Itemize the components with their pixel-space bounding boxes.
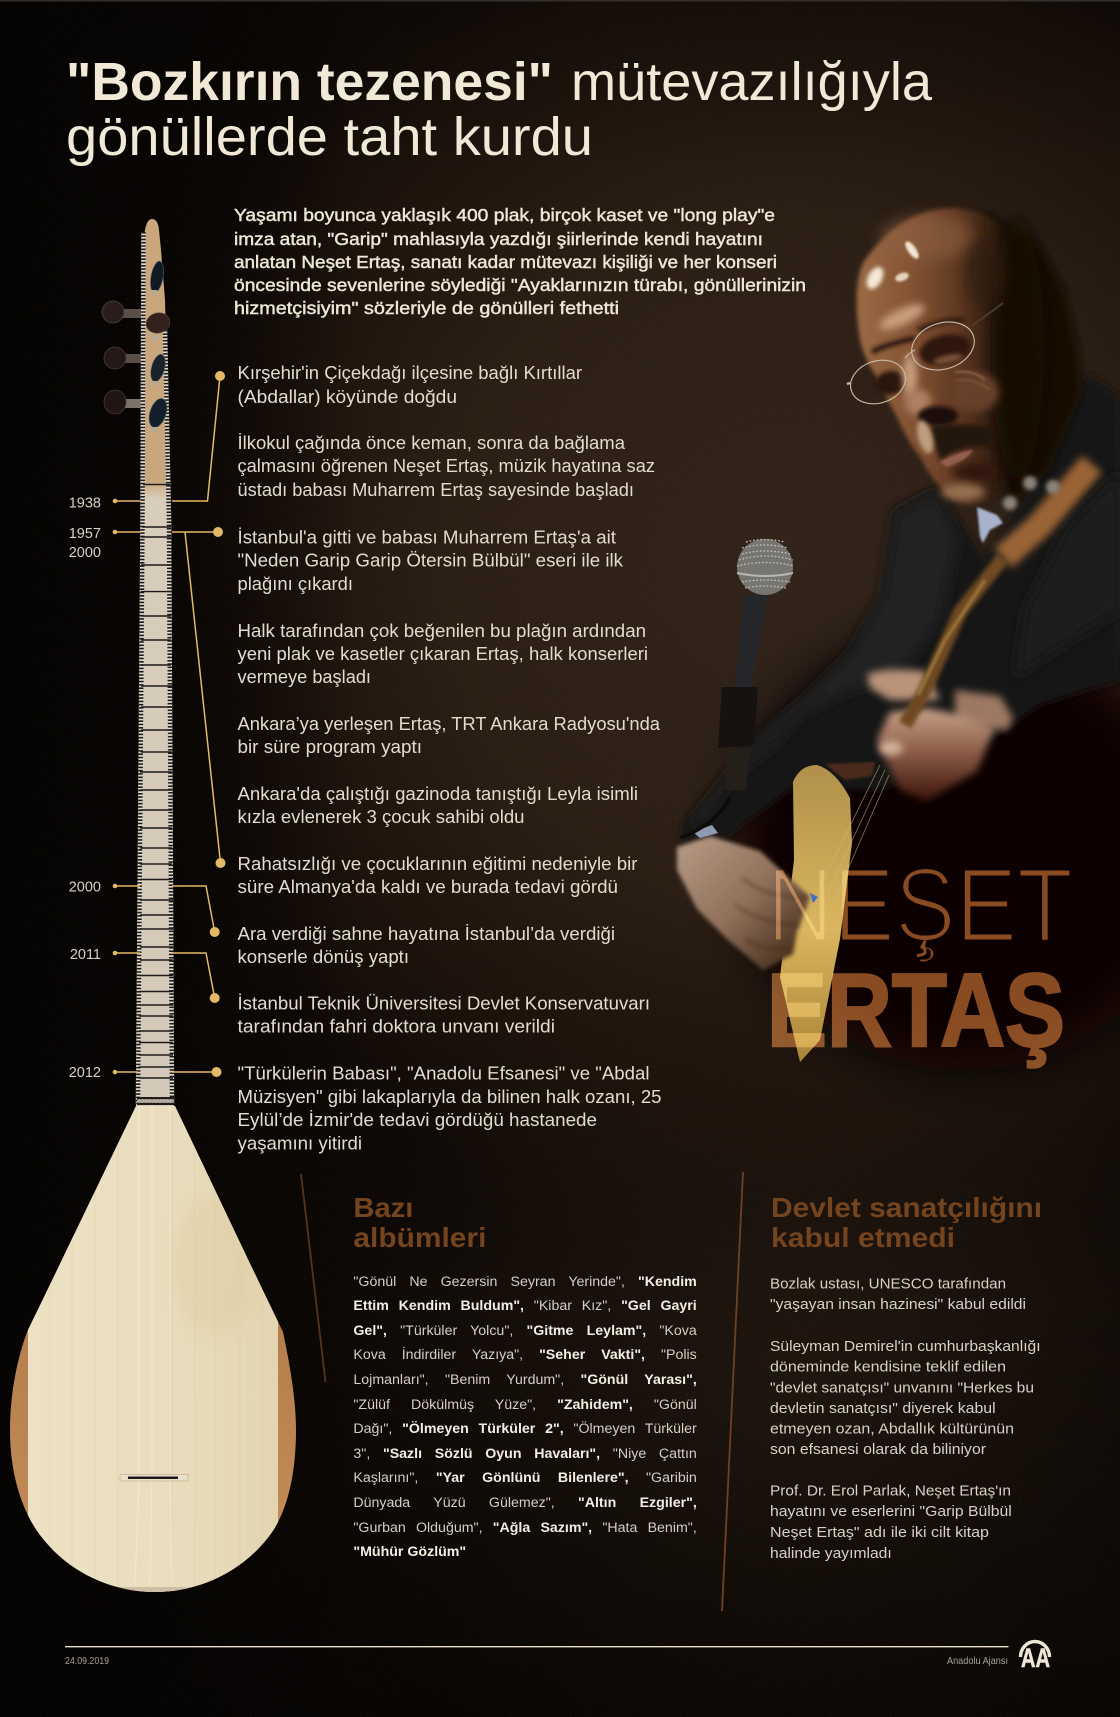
- timeline text: tarafından fahri doktora unvanı verildi: [238, 1017, 555, 1037]
- timeline years: 2000: [69, 545, 101, 561]
- connector 2012: [113, 1067, 222, 1077]
- connector 1938: [113, 371, 225, 503]
- title: "Bozkırın tezenesi": [66, 52, 553, 112]
- timeline text: [238, 363, 662, 1154]
- soundboard: [28, 1100, 278, 1600]
- neck heel ornament: [137, 1097, 174, 1105]
- mic band: [737, 573, 793, 576]
- forehead highlight top: [903, 240, 921, 260]
- connector 1957-2000: [185, 532, 226, 868]
- logo: Anadolu Ajansı: AA: [1021, 1643, 1050, 1673]
- title: [66, 52, 933, 167]
- connector 2000: [113, 884, 220, 937]
- text: albums: Kova İndirdiler Yazıya", "Seher Vakti", "Polis: [353, 1347, 697, 1363]
- eye socket left: [873, 368, 907, 398]
- heading: albums: albümleri: [353, 1222, 486, 1253]
- title: mütevazılığıyla: [571, 52, 933, 112]
- text: state artist: Bozlak ustası, UNESCO tarafından: [770, 1276, 1006, 1293]
- name: Neşet Ertaş: ERTAŞ: [767, 953, 1065, 1069]
- nose tip: [905, 389, 931, 415]
- text: state artist: hayatını ve eserlerini "Garip Bülbül: [770, 1503, 1012, 1520]
- text: state artist: döneminde kendisine teklif edilen: [770, 1358, 1006, 1375]
- microphone: [680, 539, 794, 838]
- connector 1957: [113, 527, 223, 537]
- text: albums: "Gurban Olduğum", "Ağla Sazım", "Hata Benim",: [353, 1520, 697, 1536]
- lower torso shadow: [735, 630, 1120, 1070]
- shadowed side of the head: [975, 212, 1082, 505]
- right hand with plectrum: [677, 836, 818, 970]
- timeline text: Ankara’ya yerleşen Ertaş, TRT Ankara Radyosu'nda: [238, 714, 661, 734]
- text: state artist: halinde yayımladı: [770, 1545, 892, 1562]
- timeline years: 2000: [69, 880, 101, 896]
- intro text: Yaşamı boyunca yaklaşık 400 plak, birçok kaset ve "long play"e: [234, 205, 775, 225]
- timeline text: Eylül’de İzmir'de tedavi gördüğü hastanede: [238, 1110, 597, 1130]
- shirt collar: [977, 507, 1003, 543]
- timeline years: 1957: [69, 526, 101, 542]
- blurred tuning pegs: [1003, 476, 1060, 510]
- text: albums: Dünyada Yüzü Gülemez", "Altın Ezgiler",: [353, 1495, 697, 1511]
- bottom edge band: [118, 1587, 192, 1592]
- divider slash 2: [722, 1172, 743, 1611]
- side ribs: [10, 1106, 296, 1592]
- text: state artist: etmeyen ozan, Abdallık kültürünün: [770, 1420, 1014, 1438]
- saz body: [10, 1106, 296, 1592]
- saz strings: [135, 1106, 172, 1585]
- lips: [940, 450, 973, 467]
- mic stand base: [725, 748, 750, 790]
- timeline text: Ankara'da çalıştığı gazinoda tanıştığı Leyla isimli: [238, 784, 638, 804]
- skull shading: [880, 216, 976, 260]
- saz neck in photo: [905, 558, 1003, 725]
- timeline connectors: [113, 371, 226, 1077]
- heading: state artist: Devlet sanatçılığını: [771, 1192, 1042, 1223]
- neck binding: [138, 232, 172, 1104]
- forehead highlight center: [894, 271, 910, 283]
- footer rule: [65, 1646, 1008, 1648]
- intro text: [234, 205, 806, 318]
- saz headstock in photo: [1003, 464, 1092, 558]
- text: albums: "Gönül Ne Gezersin Seyran Yerinde", "Kendim: [353, 1274, 697, 1290]
- timeline text: Kırşehir'in Çiçekdağı ilçesine bağlı Kırtıllar: [238, 363, 582, 383]
- text: albums: Gel", "Türküler Yolcu", "Gitme Leylam", "Kova: [353, 1323, 697, 1339]
- timeline text: İstanbul'a gitti ve babası Muharrem Ertaş'a ait: [238, 527, 616, 547]
- soundboard grain: [50, 1110, 240, 1587]
- text: albums: Dağı", "Ölmeyen Türküler 2", "Ölmeyen Türküler: [353, 1421, 697, 1437]
- text: albums: "Zülüf Dökülmüş Yüze", "Zahidem", "Gönül: [353, 1397, 697, 1413]
- text: albums: Kaşlarını", "Yar Gönlünü Bilenlere", "Garibin: [353, 1470, 697, 1486]
- chin: [941, 484, 985, 500]
- text: state artist: "devlet sanatçısı" unvanını "Herkes bu: [770, 1379, 1034, 1396]
- timeline text: çalmasını öğrenen Neşet Ertaş, müzik hayatına saz: [238, 456, 655, 476]
- frets: [139, 484, 173, 1078]
- timeline text: Ara verdiği sahne hayatına İstanbul’da verdiği: [238, 924, 615, 944]
- timeline text: üstadı babası Muharrem Ertaş sayesinde başladı: [238, 480, 634, 500]
- shirt cuff: [693, 825, 718, 838]
- text: albums: "Mühür Gözlüm": [353, 1544, 466, 1560]
- date: 24.09.2019: [65, 1655, 109, 1667]
- timeline text: İlkokul çağında önce keman, sonra da bağlama: [238, 433, 626, 453]
- timeline text: "Türkülerin Babası", "Anadolu Efsanesi" ve "Abdal: [238, 1064, 650, 1084]
- brow highlight: [876, 299, 928, 335]
- text: state artist: Neşet Ertaş" adı ile iki cilt kitap: [770, 1524, 989, 1541]
- forehead highlight left: [863, 264, 887, 292]
- mouth shadow: [953, 463, 997, 481]
- timeline text: vermeye başladı: [238, 667, 371, 687]
- timeline text: yaşamını yitirdi: [238, 1134, 362, 1154]
- saz instrument: [0, 219, 310, 1600]
- nose bridge: [903, 354, 917, 398]
- upper lip cheek light: [914, 419, 936, 455]
- text: state artist: Süleyman Demirel'in cumhurbaşkanlığı: [770, 1338, 1041, 1355]
- connector 2011: [113, 951, 220, 1003]
- dark side blend: [992, 220, 1044, 480]
- heading: albums: Bazı: [353, 1192, 413, 1223]
- brows: [872, 320, 965, 352]
- jacket lit sleeve: [690, 492, 958, 825]
- timeline text: Müzisyen" gibi lakaplarıyla da bilinen halk ozanı, 25: [238, 1087, 662, 1107]
- saz back pegs: [102, 301, 141, 414]
- intro text: öncesinde sevenlerine söylediği "Ayaklarınızın türabı, gönüllerinizin: [234, 275, 806, 295]
- mic grille: [737, 539, 793, 595]
- text: albums: [353, 1274, 697, 1560]
- agency name: Anadolu Ajansı: [947, 1655, 1008, 1667]
- name: Neşet Ertaş: [767, 847, 1073, 1069]
- title: gönüllerde taht kurdu: [66, 107, 593, 167]
- timeline text: süre Almanya'da kaldı ve burada tedavi gördü: [238, 877, 618, 897]
- saz neck: [136, 219, 174, 1106]
- text: state artist: son efsanesi olarak da biliniyor: [770, 1441, 986, 1458]
- moustache: [930, 424, 996, 460]
- jacket lit front: [1015, 470, 1120, 680]
- face: [857, 208, 1032, 505]
- timeline text: (Abdallar) köyünde doğdu: [238, 387, 457, 407]
- glasses: [845, 303, 1003, 411]
- text: state artist: devletin sanatçısı" diyerek kabul: [770, 1400, 996, 1417]
- forehead dark side: [965, 234, 1005, 310]
- text: state artist: Prof. Dr. Erol Parlak, Neşet Ertaş'ın: [770, 1483, 1011, 1500]
- eye socket right: [916, 330, 974, 370]
- intro text: imza atan, "Garip" mahlasıyla yazdığı şiirlerinde kendi hayatını: [234, 229, 763, 249]
- timeline text: plağını çıkardı: [238, 574, 353, 594]
- eyelid right: [932, 352, 964, 366]
- timeline years: 2011: [70, 947, 101, 963]
- heading: albums: [353, 1192, 486, 1253]
- intro text: anlatan Neşet Ertaş, sanatı kadar mütevazı kişiliği ve her konseri: [234, 252, 777, 272]
- photo: Neşet Ertaş playing the saz: [677, 208, 1120, 1070]
- timeline years: 1938: [69, 496, 101, 512]
- timeline text: konserle dönüş yaptı: [238, 947, 409, 967]
- name: Neşet Ertaş: NEŞET: [767, 847, 1073, 964]
- timeline text: bir süre program yaptı: [238, 737, 422, 757]
- saz body in photo: [780, 765, 852, 1062]
- saz back strip: [825, 762, 875, 780]
- nose underside: [918, 406, 958, 426]
- divider slash 1: [301, 1174, 326, 1382]
- timeline text: yeni plak ve kasetler çıkaran Ertaş, halk konserleri: [238, 644, 648, 664]
- cheek: [951, 372, 999, 412]
- timeline text: Halk tarafından çok beğenilen bu plağın ardından: [238, 621, 646, 641]
- heading: state artist: [771, 1192, 1042, 1253]
- saz strings: [816, 765, 889, 915]
- timeline years: 2012: [69, 1065, 101, 1081]
- text: albums: 3", "Sazlı Sözlü Oyun Havaları", "Niye Çattın: [353, 1446, 697, 1462]
- mic cable: [680, 798, 730, 838]
- cheek wrinkles: [955, 372, 990, 390]
- saz front pegs: [144, 260, 172, 432]
- jacket: [680, 373, 1120, 842]
- text: state artist: [770, 1276, 1041, 1562]
- text: albums: Lojmanları", "Benim Yurdum", "Gönül Yarası",: [353, 1372, 697, 1388]
- timeline text: Rahatsızlığı ve çocuklarının eğitimi nedeniyle bir: [238, 854, 638, 874]
- saz bridge: [120, 1474, 188, 1481]
- timeline years: [69, 496, 101, 1081]
- left hand on the neck: [867, 670, 1013, 801]
- timeline text: kızla evlenerek 3 çocuk sahibi oldu: [238, 807, 524, 827]
- intro text: hizmetçisiyim" sözleriyle de gönülleri fethetti: [234, 298, 619, 318]
- neck light strip: [918, 580, 985, 695]
- timeline text: "Neden Garip Garip Ötersin Bülbül" eseri ile ilk: [238, 551, 624, 571]
- heading: state artist: kabul etmedi: [771, 1222, 955, 1253]
- mic clamp: [718, 687, 758, 748]
- text: albums: Ettim Kendim Buldum", "Kibar Kız", "Gel Gayri: [353, 1298, 697, 1314]
- text: state artist: "yaşayan insan hazinesi" kabul edildi: [770, 1296, 1026, 1313]
- timeline text: İstanbul Teknik Üniversitesi Devlet Konservatuvarı: [238, 994, 650, 1014]
- mic handle: [735, 595, 768, 690]
